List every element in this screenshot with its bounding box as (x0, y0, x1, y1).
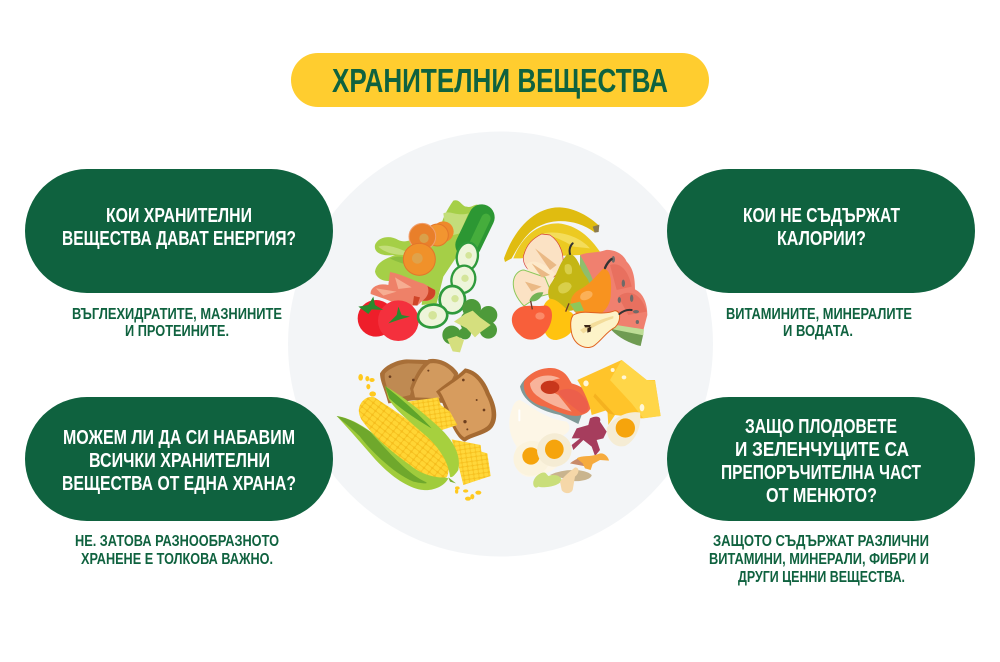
panel: single food question: ВЕЩЕСТВА ОТ ЕДНА ХРАНА? (62, 473, 296, 495)
answer: single food (75, 533, 279, 568)
answer: single food: ХРАНЕНЕ Е ТОЛКОВА ВАЖНО. (81, 551, 273, 568)
answer: fruit and vegetables: ДРУГИ ЦЕННИ ВЕЩЕСТВА. (738, 569, 905, 586)
panel: no calories question: КАЛОРИИ? (777, 228, 866, 250)
answer: no calories: И ВОДАТА. (783, 323, 853, 340)
central plate circle (288, 132, 713, 556)
icon: fruit (504, 207, 647, 347)
answer: energy: ВЪГЛЕХИДРАТИТЕ, МАЗНИНИТЕ (72, 306, 282, 323)
answer: fruit and vegetables: ЗАЩОТО СЪДЪРЖАТ РАЗЛИЧНИ (713, 533, 929, 550)
icon: bread and corn (337, 359, 496, 501)
panel: single food question (25, 397, 333, 521)
panel: no calories question (667, 169, 975, 293)
panel: fruit and vegetables question: ЗАЩО ПЛОДОВЕТЕ (745, 416, 897, 438)
panel: fruit and vegetables question: И ЗЕЛЕНЧУЦИТЕ СА (735, 439, 909, 461)
panel: fruit and vegetables question: ОТ МЕНЮТО? (766, 485, 877, 507)
icon: vegetables (358, 200, 497, 352)
panel: fruit and vegetables question: ПРЕПОРЪЧИТЕЛНА ЧАСТ (721, 462, 921, 484)
answer: single food: НЕ. ЗАТОВА РАЗНООБРАЗНОТО (75, 533, 279, 550)
panel: energy question: КОИ ХРАНИТЕЛНИ (106, 205, 252, 227)
panel: single food question: МОЖЕМ ЛИ ДА СИ НАБАВИМ (63, 427, 295, 449)
icon: protein foods (509, 360, 661, 493)
answer: fruit and vegetables (709, 533, 929, 586)
title pill (291, 53, 709, 107)
panel: fruit and vegetables question (667, 397, 975, 521)
panel: energy question: ВЕЩЕСТВА ДАВАТ ЕНЕРГИЯ? (62, 228, 296, 250)
answer: no calories (726, 306, 912, 340)
answer: no calories: ВИТАМИНИТЕ, МИНЕРАЛИТЕ (726, 306, 912, 323)
panel: no calories question: КОИ НЕ СЪДЪРЖАТ (743, 205, 900, 227)
title text: ХРАНИТЕЛНИ ВЕЩЕСТВА (332, 62, 668, 99)
answer: energy: И ПРОТЕИНИТЕ. (125, 323, 229, 340)
answer: energy (72, 306, 282, 340)
panel: energy question (25, 169, 333, 293)
panel: single food question: ВСИЧКИ ХРАНИТЕЛНИ (89, 450, 270, 472)
answer: fruit and vegetables: ВИТАМИНИ, МИНЕРАЛИ, ФИБРИ И (709, 551, 929, 568)
